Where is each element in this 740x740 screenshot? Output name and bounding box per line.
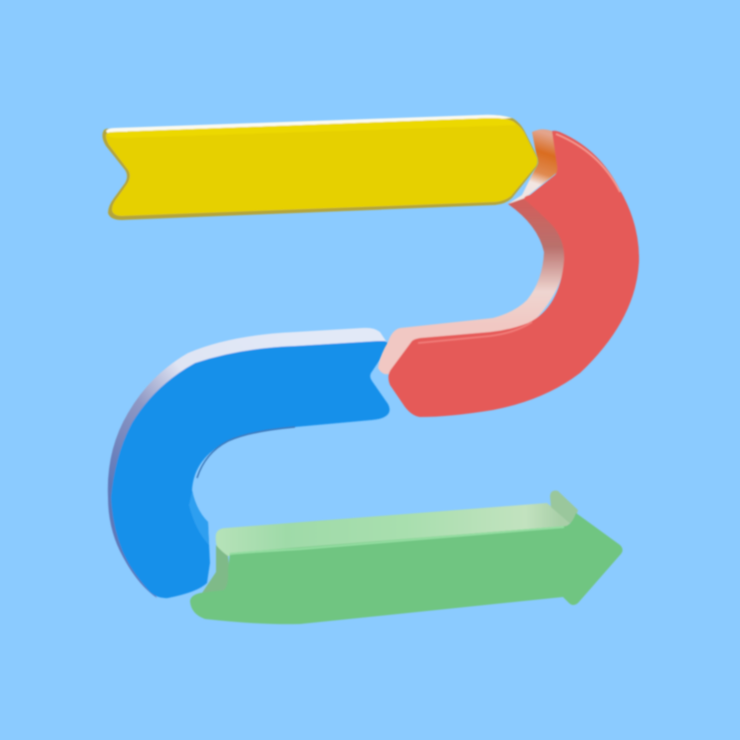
yellow dark edge silhouette — [102, 115, 538, 220]
blue inner lower crease — [189, 492, 209, 545]
red back bevel — [378, 195, 566, 374]
green highlight line — [230, 527, 564, 554]
red outer highlight — [556, 134, 620, 192]
green back bevel — [216, 503, 570, 556]
yellow main face — [106, 118, 537, 216]
yellow top white edge — [106, 115, 512, 134]
blue underside shade — [197, 427, 295, 478]
arrow segment: green — [190, 491, 622, 624]
arrow segment: blue — [108, 328, 390, 598]
arrow segment: yellow — [102, 115, 538, 220]
green main face — [190, 513, 622, 624]
yellow top face light band — [108, 118, 516, 138]
red notch back strip — [508, 129, 560, 204]
green flange — [550, 491, 578, 524]
red highlight line — [418, 322, 532, 343]
blue back rim — [108, 328, 388, 598]
red main face — [388, 131, 639, 417]
blue main face — [111, 341, 390, 598]
arrow segment: red — [378, 129, 639, 417]
green shadowed tab behind blue — [200, 545, 232, 596]
